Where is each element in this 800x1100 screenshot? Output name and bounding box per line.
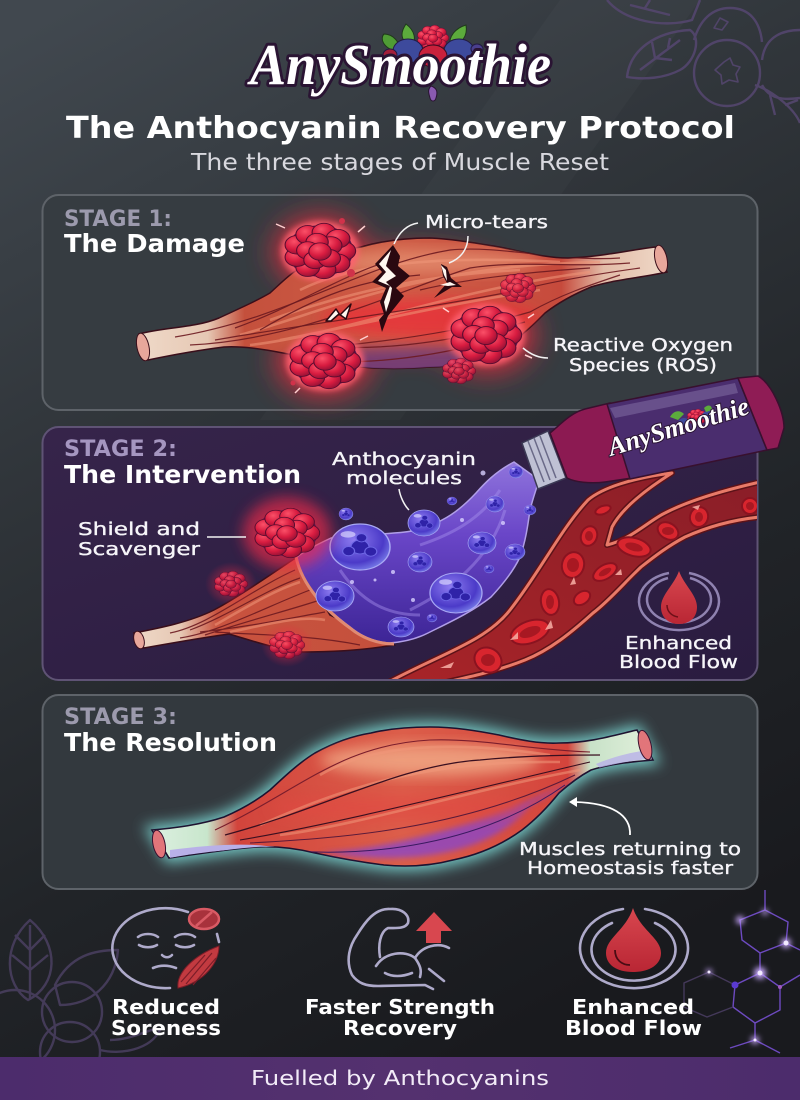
callout: anthocyanin molecules: molecules [346, 468, 462, 489]
muscle: healed [150, 727, 655, 866]
callout: homeostasis: Homeostasis faster [527, 858, 734, 879]
callout: shield and scavenger [78, 519, 246, 560]
icon: face with muscle [112, 908, 219, 988]
molecule bubbles [316, 466, 536, 637]
label: Faster Strength [305, 995, 495, 1019]
muscle: damaged [134, 238, 670, 383]
callout: ROS: Reactive Oxygen [553, 335, 733, 356]
callout: micro-tears [394, 212, 548, 263]
red blood cells [470, 498, 758, 677]
drip [429, 86, 437, 101]
callout: ROS [523, 335, 733, 376]
icon: flexed arm and up arrow [349, 909, 452, 989]
callout: enhanced blood flow: Enhanced [625, 633, 732, 654]
callout: enhanced blood flow: Blood Flow [619, 652, 738, 673]
logo [247, 24, 551, 101]
muscle: partial [132, 557, 394, 652]
blood vessel [385, 473, 760, 686]
icon: bottle berries [670, 406, 714, 428]
callout: enhanced blood flow [619, 633, 738, 673]
stage 1 red glow [274, 216, 535, 397]
label: Blood Flow [565, 1016, 702, 1040]
icon: logo berries [382, 24, 483, 67]
decoration: blueberry outlines top right [607, 0, 800, 123]
label [305, 995, 495, 1040]
label: Soreness [111, 1016, 221, 1040]
panel: stage 3 [42, 695, 758, 889]
label [111, 995, 221, 1040]
benefit: enhanced blood flow [565, 908, 702, 1040]
scavenger clusters [205, 497, 331, 667]
callout: shield and scavenger: Scavenger [78, 539, 201, 560]
stage 3 kicker: STAGE 3: [64, 705, 177, 730]
label: Enhanced [572, 995, 694, 1019]
decoration: blueberry outlines bottom left [0, 920, 160, 1082]
callout: shield and scavenger: Shield and [78, 519, 200, 540]
stage 1 heading: The Damage [64, 229, 245, 258]
callout: micro-tears: Micro-tears [425, 212, 548, 233]
callout: homeostasis: Muscles returning to [519, 839, 741, 860]
icon: drop with rings [580, 908, 688, 988]
decoration: diagonal sheen [260, 0, 700, 420]
anthocyanin stream [296, 462, 539, 644]
wordmark: AnySmoothie [247, 32, 551, 97]
panel: stage 1 [42, 195, 758, 410]
footer band [0, 1057, 800, 1100]
ROS clusters [276, 218, 536, 393]
callout: anthocyanin molecules: Anthocyanin [332, 449, 476, 470]
bottle [522, 376, 784, 489]
label: Reduced [112, 995, 220, 1019]
icon: blood drop with rings [639, 571, 719, 630]
benefit: reduced soreness [111, 908, 221, 1040]
stage 3 heading: The Resolution [64, 728, 277, 757]
callout: anthocyanin molecules [332, 449, 476, 510]
title: The Anthocyanin Recovery Protocol [66, 111, 735, 146]
panel: stage 2 [42, 427, 760, 686]
bottle wordmark: AnySmoothie [602, 391, 752, 462]
footer text: Fuelled by Anthocyanins [251, 1066, 549, 1090]
label [565, 995, 702, 1040]
callout: homeostasis [519, 839, 741, 879]
stage 2 kicker: STAGE 2: [64, 437, 177, 462]
stage 1 kicker: STAGE 1: [64, 207, 172, 232]
micro-tears [326, 245, 462, 332]
callout: ROS: Species (ROS) [569, 355, 717, 376]
arrow: to muscle [569, 797, 630, 835]
subtitle: The three stages of Muscle Reset [190, 150, 609, 176]
stage 2 heading: The Intervention [64, 460, 301, 489]
label: Recovery [343, 1016, 457, 1040]
decoration: molecule network bottom right [684, 890, 800, 1053]
benefit: faster strength recovery [305, 909, 495, 1040]
